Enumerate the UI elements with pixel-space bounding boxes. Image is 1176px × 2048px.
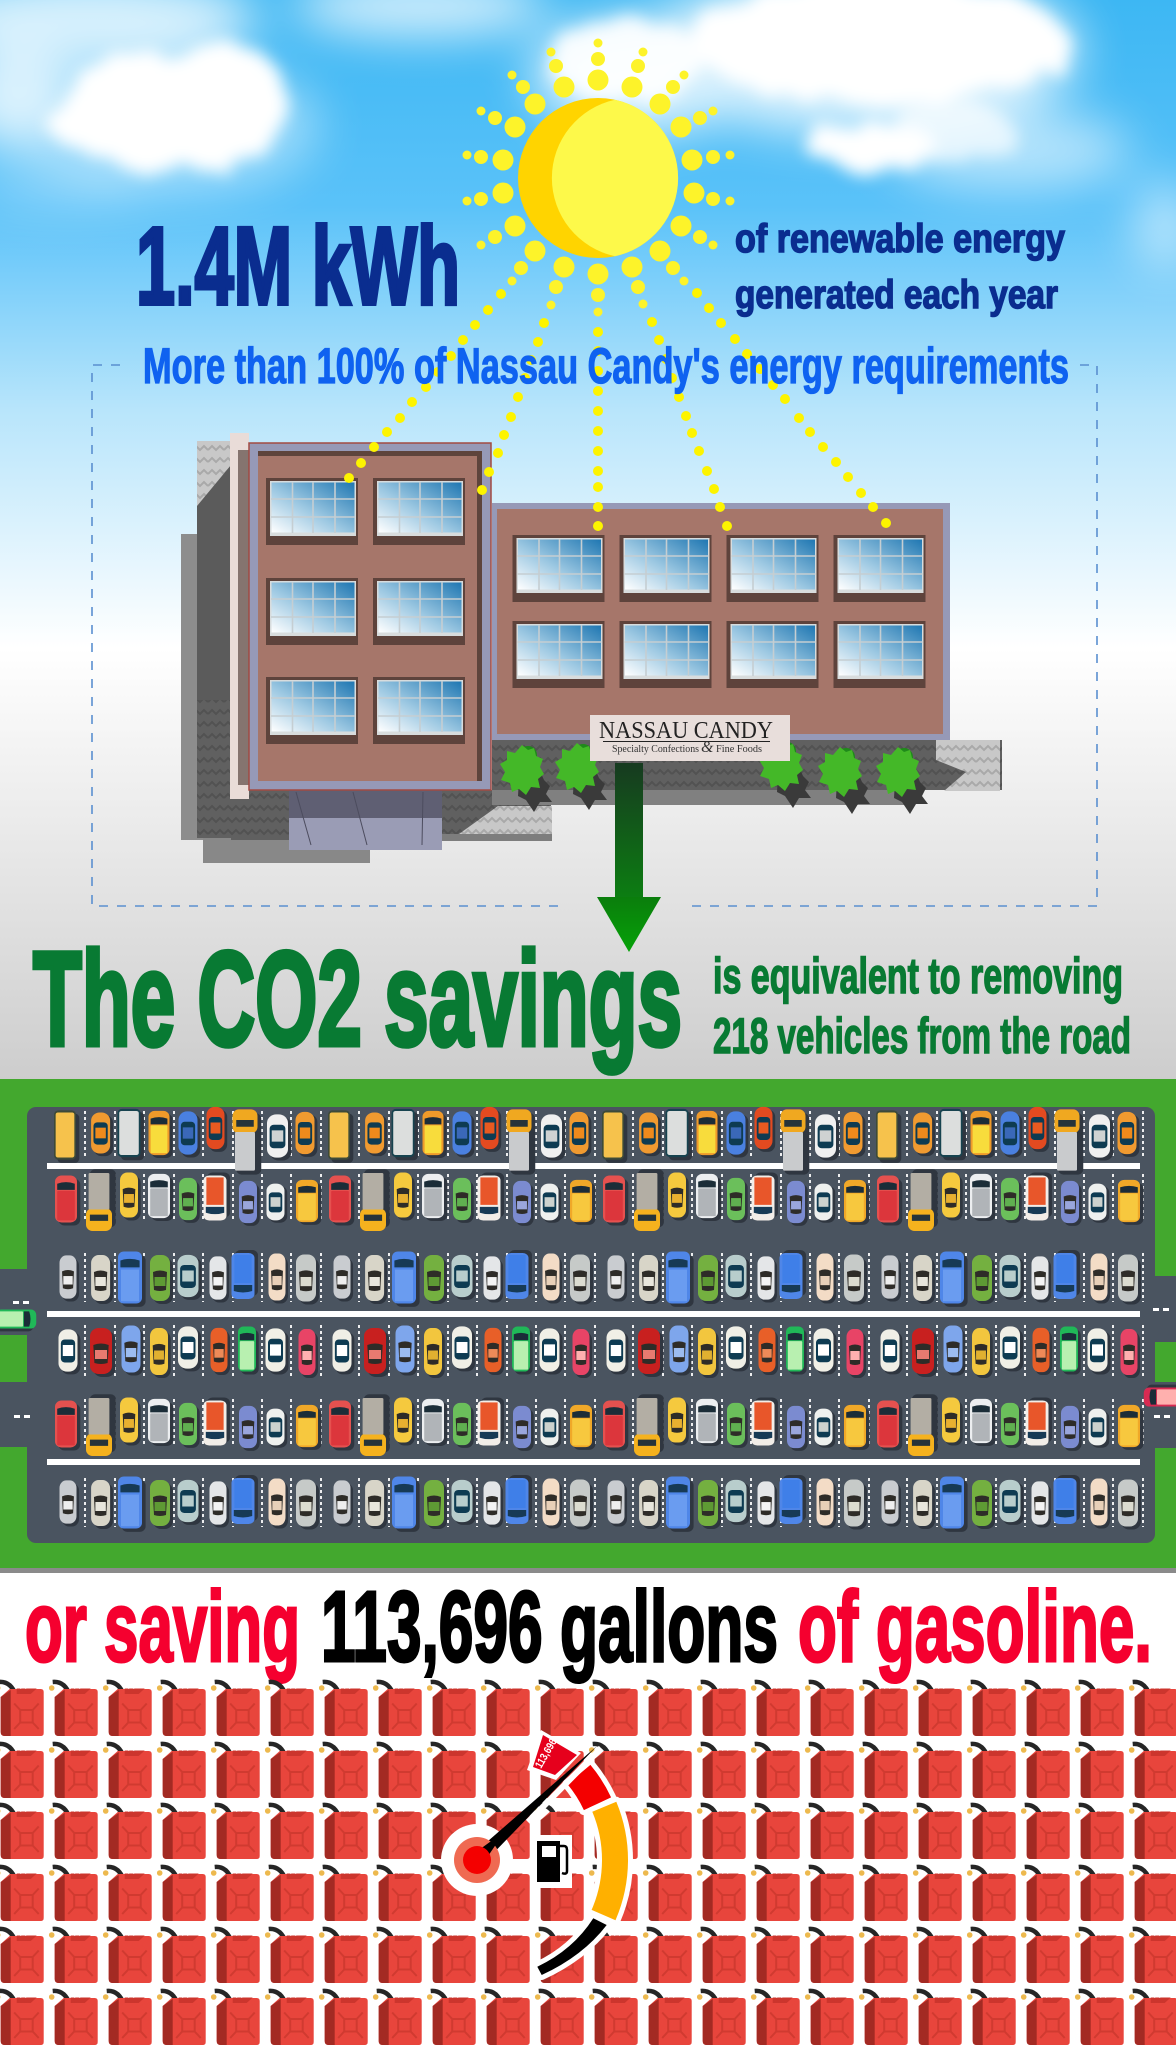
- vehicles caption: [713, 948, 1131, 1064]
- right wing: [492, 503, 950, 740]
- gauge black zone: [537, 1918, 607, 1975]
- fuel gauge: [441, 1730, 628, 1975]
- headline: The CO2 savings: The CO2 savings: [33, 925, 682, 1074]
- gauge red zone: [567, 1765, 611, 1810]
- grid of red gas cans: [0, 1682, 1176, 2045]
- shrubs: [500, 741, 928, 814]
- renewable energy caption: [735, 217, 1066, 317]
- needle: [472, 1746, 601, 1865]
- hub backing: [441, 1824, 513, 1896]
- value tag: 113,696: [533, 1737, 560, 1770]
- gasoline headline: 113,696 gallons: [321, 1571, 778, 1683]
- renewable energy caption: of renewable energy: [735, 217, 1066, 261]
- Nassau Candy sign: NASSAU CANDY: [599, 718, 773, 744]
- ground and shadows: [181, 441, 1002, 863]
- gasoline headline: or saving: [25, 1571, 300, 1683]
- fuel pump icon: [531, 1835, 572, 1888]
- white lane lines: [13, 1163, 1170, 1465]
- road entrances: [0, 1269, 1176, 1448]
- Nassau Candy sign: [590, 715, 790, 761]
- parked cars row 1: [54, 1107, 1143, 1175]
- parking lot: [0, 1079, 1176, 1573]
- moving pink car: [1144, 1385, 1176, 1406]
- parked cars row 3: [60, 1250, 1143, 1307]
- headline: 1.4M kWh: 1.4M kWh: [136, 205, 460, 328]
- parked cars row 4: [58, 1325, 1143, 1378]
- renewable energy caption: generated each year: [735, 273, 1058, 317]
- clouds: [0, 0, 1176, 270]
- dashed frame around the building: [92, 365, 1097, 906]
- sun with rays: [462, 38, 734, 316]
- hub: [454, 1831, 505, 1883]
- sun beams dotted lines: [344, 288, 891, 531]
- green arrow: [597, 763, 661, 952]
- parked cars row 2: [55, 1169, 1143, 1231]
- gauge yellow zone: [592, 1802, 628, 1920]
- parked cars row 6: [60, 1475, 1143, 1532]
- Nassau Candy sign: &: [701, 739, 714, 756]
- Nassau Candy sign: Fine Foods: [716, 744, 762, 755]
- building illustration: [181, 433, 1002, 863]
- parked cars row 5: [55, 1394, 1143, 1456]
- Nassau Candy sign: Specialty Confections: [612, 744, 699, 755]
- tall wing: [230, 433, 491, 799]
- sky background: [0, 0, 1176, 1080]
- value tag: [527, 1730, 581, 1780]
- moving green car: [0, 1310, 36, 1331]
- gasoline headline: [0, 1571, 1176, 2048]
